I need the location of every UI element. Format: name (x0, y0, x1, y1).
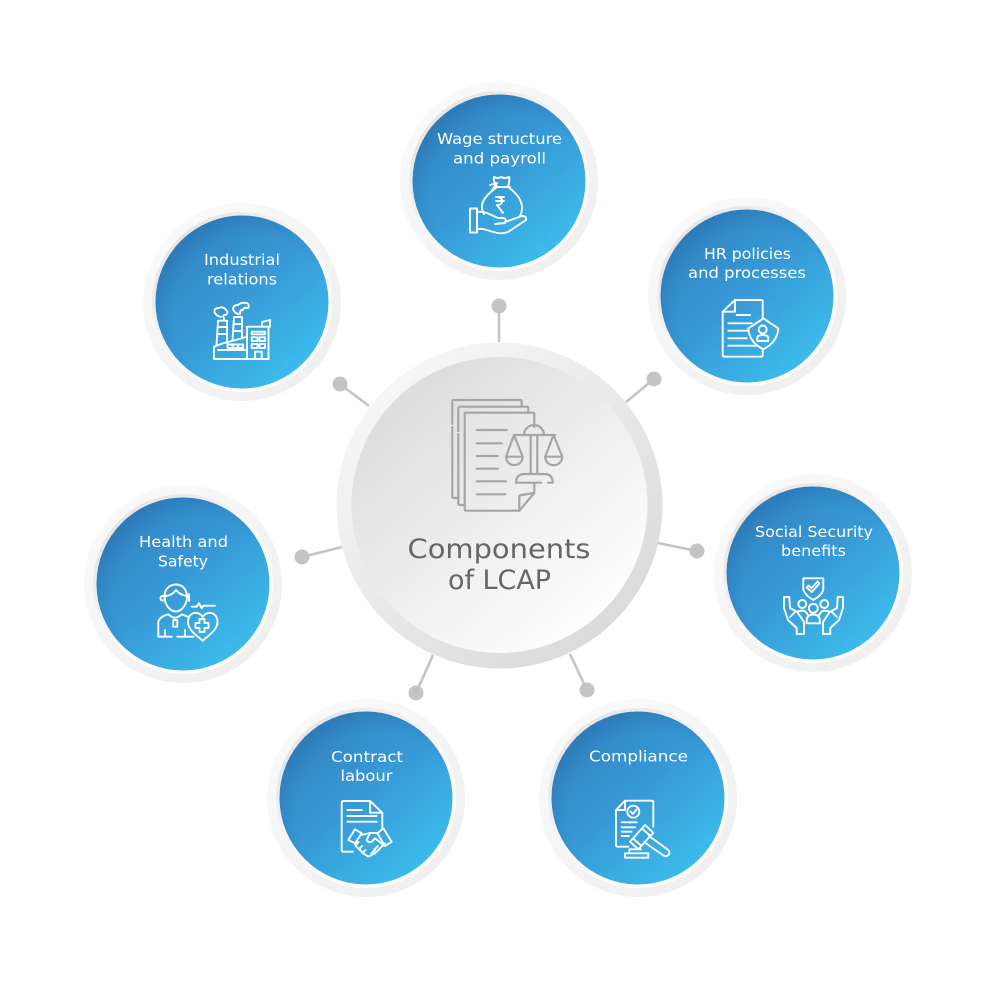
panel: Social Security benefits (714, 474, 912, 672)
panel: Industrial relations (143, 203, 341, 401)
label (331, 748, 403, 785)
icon: document and gavel (616, 801, 669, 858)
connector: contract labour (408, 655, 433, 700)
label: Contract (331, 748, 403, 766)
label: relations (207, 270, 277, 288)
panel: Health and Safety (84, 485, 282, 683)
label (204, 251, 280, 288)
label: HR policies (704, 245, 791, 263)
label: benefits (781, 542, 846, 560)
panel: Compliance (539, 699, 737, 897)
label (688, 245, 806, 282)
label (139, 533, 228, 570)
panel: Contract labour (267, 699, 465, 897)
connector: HR policies (626, 372, 662, 402)
connector: health and safety (294, 547, 342, 564)
connector: compliance (570, 654, 594, 698)
heading: Components of LCAP: Components (408, 534, 590, 565)
panel: Wage structure and payroll (400, 82, 598, 280)
heading: Components of LCAP: of LCAP (448, 565, 551, 596)
icon: document with shield (723, 300, 778, 357)
label: and processes (688, 264, 806, 282)
connector: industrial relations (332, 376, 369, 406)
heading: Components of LCAP (408, 534, 590, 596)
icon: hands protecting family (784, 578, 843, 634)
icon: contract and handshake (342, 801, 392, 857)
label (437, 130, 562, 168)
label: Compliance (589, 748, 688, 766)
connector: wage structure (492, 298, 506, 342)
panel: central hub (336, 342, 662, 668)
label: Industrial (204, 251, 280, 269)
label: and payroll (453, 150, 546, 168)
icon: money bag on hand (470, 177, 526, 233)
connector: social security (658, 543, 704, 558)
panel: HR policies and processes (648, 197, 846, 395)
icon: worker with heart (158, 584, 218, 641)
label: Health and (139, 533, 228, 551)
label (755, 523, 873, 560)
label: Social Security (755, 523, 873, 541)
icon: documents and scales (452, 400, 562, 511)
icon: factory (214, 303, 270, 359)
label: Safety (158, 552, 208, 570)
label: Wage structure (437, 130, 562, 148)
label: labour (340, 767, 393, 785)
